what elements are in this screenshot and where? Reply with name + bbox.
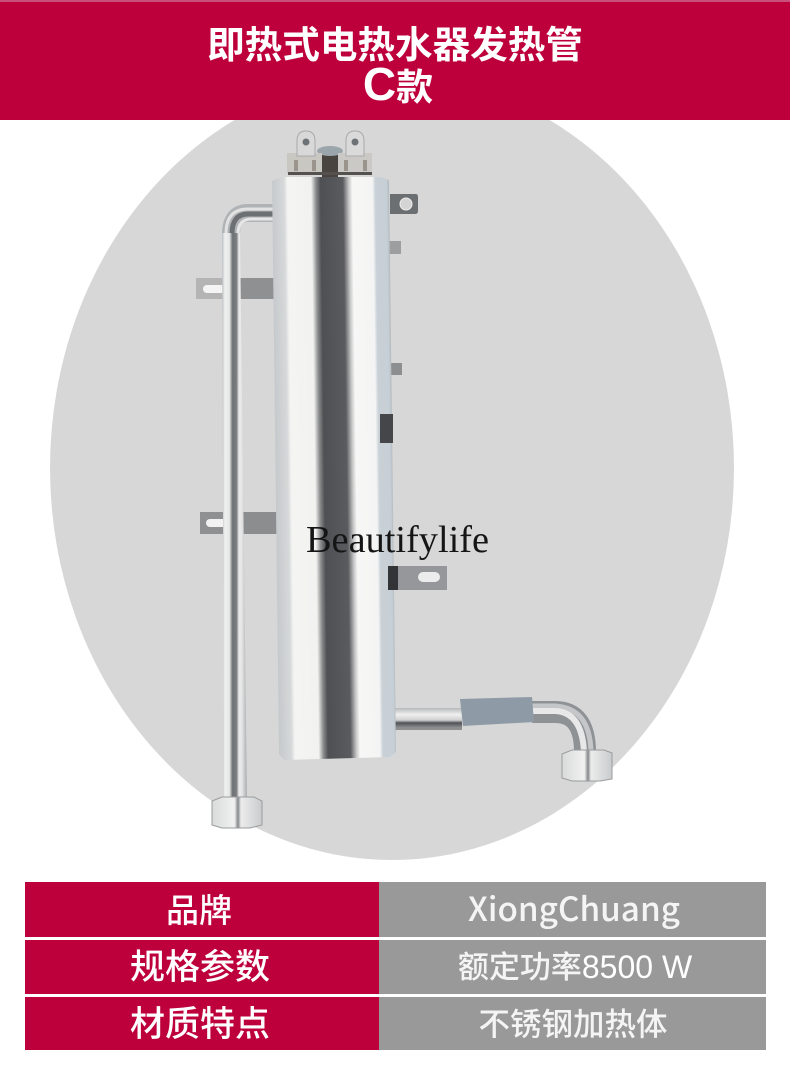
outlet pipe with elbow bbox=[392, 706, 591, 752]
row: specification: 额定功率8500 W bbox=[458, 949, 693, 985]
cylinder body bbox=[272, 177, 396, 760]
row: material bbox=[25, 997, 766, 1050]
left mounting brackets bbox=[196, 278, 280, 534]
row: brand: XiongChuang bbox=[468, 883, 680, 931]
upper right tabs bbox=[387, 194, 418, 375]
row: brand bbox=[25, 882, 766, 937]
pipe sleeve bbox=[460, 697, 534, 726]
subtitle: C model: C款 bbox=[363, 58, 433, 110]
background ellipse bbox=[50, 76, 734, 860]
row: material: 不锈钢加热体 bbox=[478, 1006, 668, 1042]
row: material: 材质特点 bbox=[130, 1005, 270, 1044]
top terminals bbox=[287, 131, 372, 177]
side clips on cylinder bbox=[380, 414, 447, 590]
spec table bbox=[25, 882, 766, 1050]
product: stainless steel heater tube bbox=[196, 131, 612, 828]
watermark: Beautifylife bbox=[306, 519, 489, 561]
row: specification bbox=[25, 940, 766, 994]
row: specification: 规格参数 bbox=[130, 948, 270, 987]
row: brand: 品牌 bbox=[166, 892, 232, 929]
bottom left nut bbox=[212, 797, 262, 828]
header banner bbox=[0, 0, 790, 120]
inlet pipe with elbow bbox=[222, 209, 274, 800]
bottom right nut bbox=[562, 750, 612, 781]
title: 即热式电热水器发热管 bbox=[207, 24, 583, 66]
